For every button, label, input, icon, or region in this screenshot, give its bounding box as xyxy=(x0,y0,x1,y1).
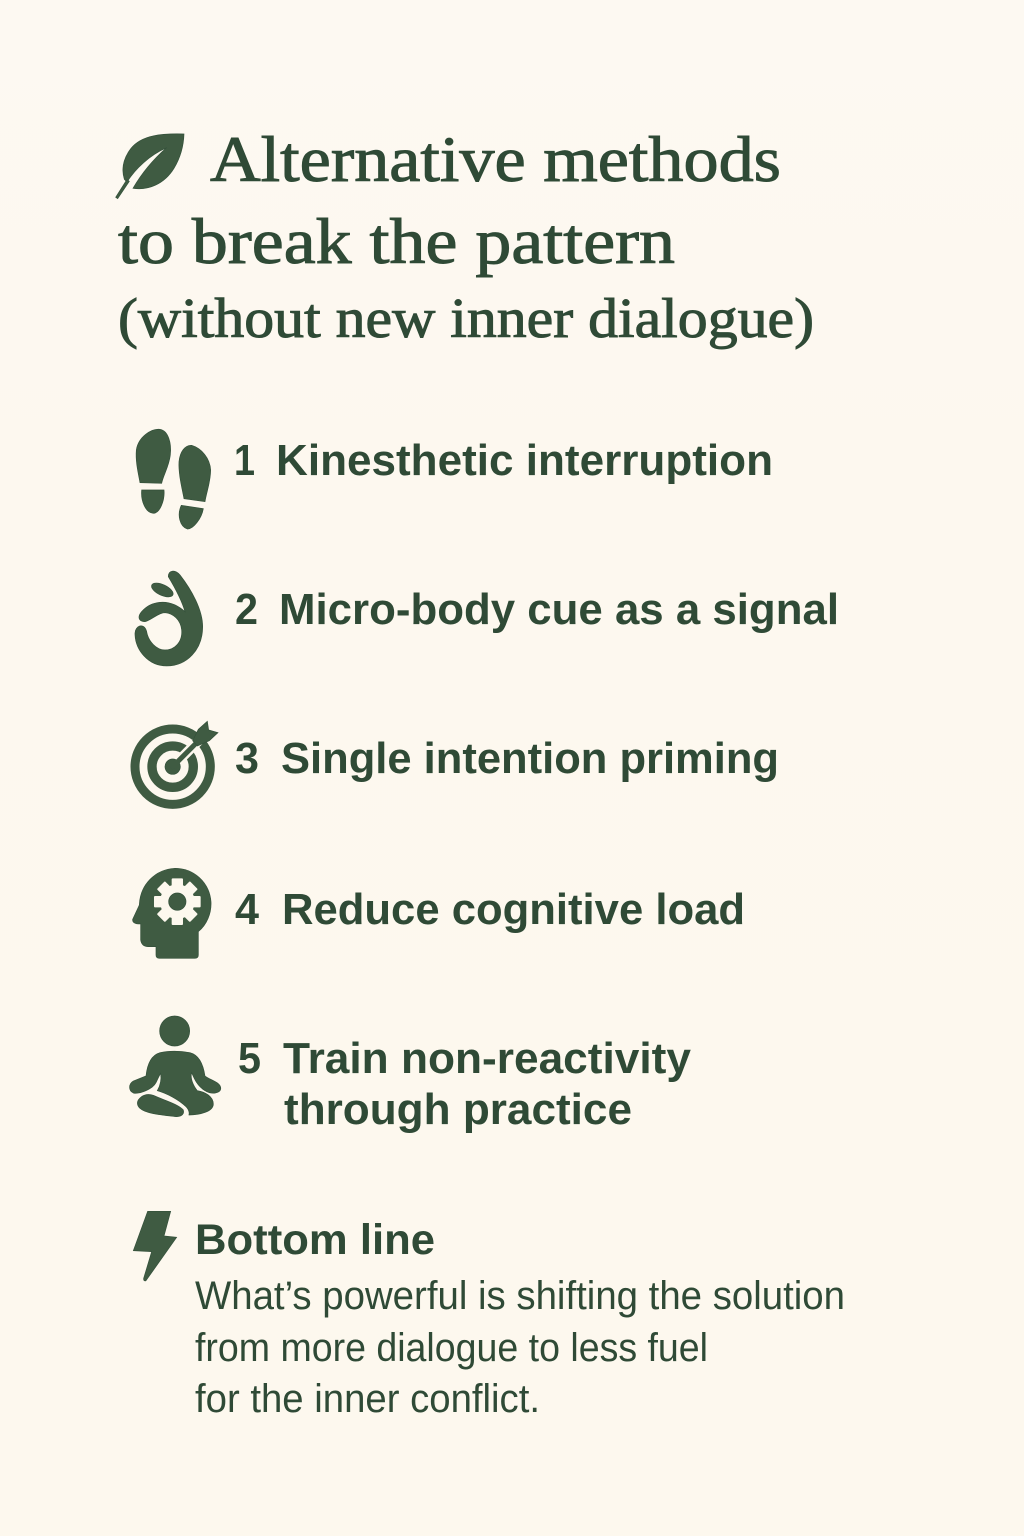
title line 2: to break the pattern xyxy=(118,206,675,278)
body text: from more dialogue to less fuel xyxy=(195,1326,708,1370)
number 5: 5 xyxy=(238,1034,261,1083)
icon: footprints xyxy=(136,429,211,529)
number 1: 1 xyxy=(234,436,255,485)
label: Kinesthetic interruption: Kinesthetic interruption xyxy=(276,436,773,485)
number 2: 2 xyxy=(235,585,258,634)
list item 4 xyxy=(133,868,745,958)
heading: Bottom line: Bottom line xyxy=(195,1216,435,1264)
title block xyxy=(116,124,814,350)
number 4: 4 xyxy=(235,885,260,934)
list item 3 xyxy=(135,721,779,804)
icon: head with gear xyxy=(133,868,211,958)
label: Train non-reactivity through practice: Train non-reactivity xyxy=(283,1034,692,1083)
label: Reduce cognitive load: Reduce cognitive load xyxy=(282,885,745,934)
icon: lightning bolt xyxy=(133,1211,177,1281)
list item 1 xyxy=(136,429,773,529)
body text: What’s powerful is shifting the solution xyxy=(195,1274,845,1318)
list item 2 xyxy=(135,571,839,666)
body text xyxy=(195,1274,845,1421)
list item 5 xyxy=(130,1016,692,1134)
label: Single intention priming: Single intention priming xyxy=(281,734,779,783)
label: Micro-body cue as a signal: Micro-body cue as a signal xyxy=(279,585,839,634)
number 3: 3 xyxy=(235,734,259,783)
label: Train non-reactivity through practice xyxy=(283,1034,692,1134)
bottom line callout xyxy=(133,1211,845,1421)
icon: leaf xyxy=(116,134,184,199)
icon: target with arrow xyxy=(135,721,218,804)
subtitle line: (without new inner dialogue) xyxy=(118,288,814,350)
title line 1: Alternative methods xyxy=(210,124,781,196)
body text: for the inner conflict. xyxy=(195,1377,540,1421)
icon: ok hand xyxy=(135,571,203,666)
label: Train non-reactivity through practice: through practice xyxy=(284,1085,632,1134)
icon: meditating person xyxy=(130,1016,221,1117)
